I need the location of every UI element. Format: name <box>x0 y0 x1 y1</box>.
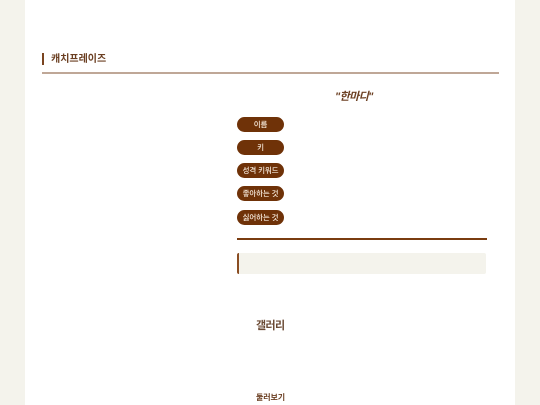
label: dislikes <box>237 210 284 225</box>
heading: catchphrase <box>42 53 108 65</box>
label: likes: 좋아하는 것 <box>243 189 278 198</box>
quote: "한마디" <box>335 91 373 103</box>
label: dislikes: 싫어하는 것 <box>243 213 278 222</box>
empty note box <box>237 253 486 274</box>
label: height: 키 <box>257 143 264 152</box>
label: personality keywords: 성격 키워드 <box>243 166 278 175</box>
heading rule <box>42 72 499 74</box>
label: name: 이름 <box>254 120 267 129</box>
divider <box>237 238 487 240</box>
link: look around: 둘러보기 <box>256 393 285 402</box>
label: name <box>237 117 284 132</box>
label: likes <box>237 186 284 201</box>
label: personality keywords <box>237 163 284 178</box>
heading: gallery: 갤러리 <box>256 320 285 332</box>
heading text: 캐치프레이즈 <box>51 54 106 65</box>
label: height <box>237 140 284 155</box>
